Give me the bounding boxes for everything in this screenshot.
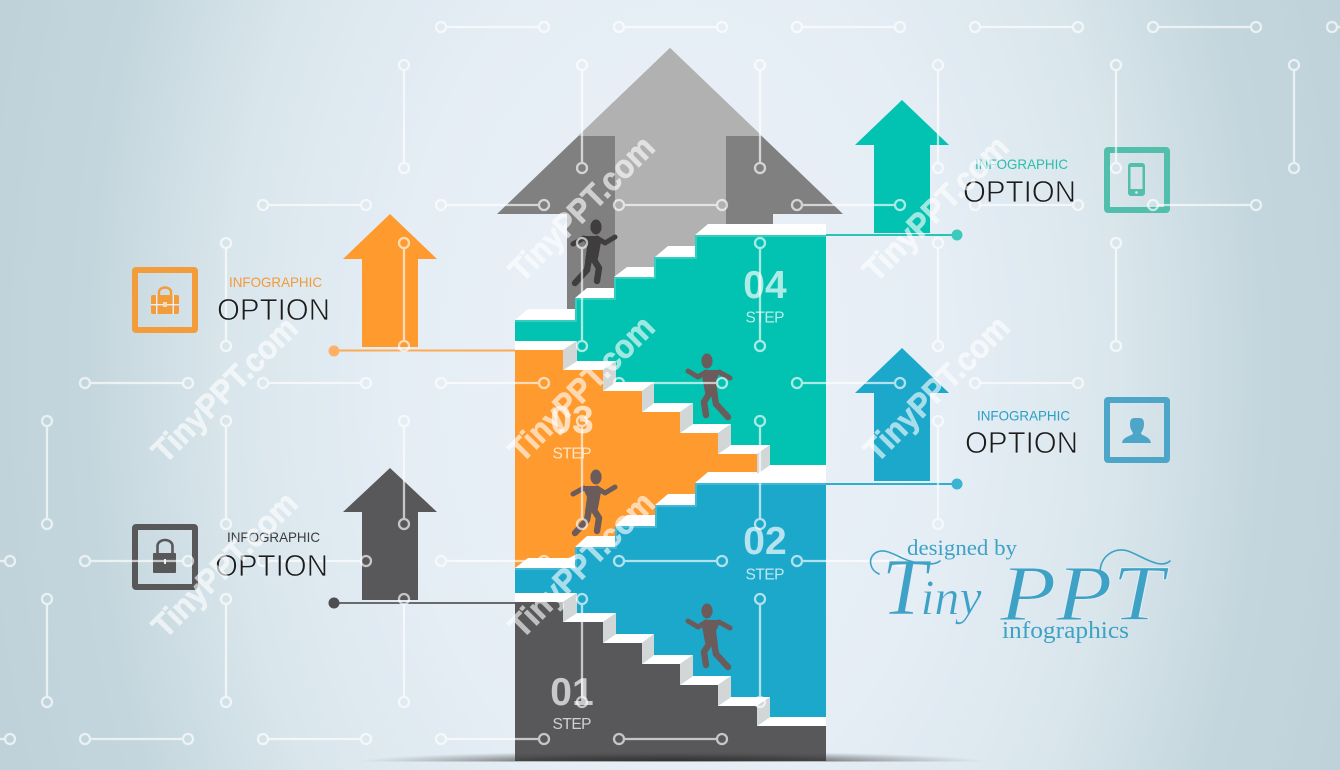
arrow: orange option	[328, 214, 515, 356]
watermarks	[144, 128, 1017, 645]
upper stair treads on blue	[515, 472, 826, 568]
step 03 label: 03	[550, 399, 594, 442]
text: blue option: INFOGRAPHIC	[977, 408, 1070, 424]
descending steps between blue and grey	[515, 593, 826, 726]
icon: briefcase in orange frame	[135, 270, 195, 330]
text: orange option: OPTION	[217, 293, 330, 327]
arrow: teal option	[826, 100, 962, 240]
watermarks: TinyPPT.com	[855, 128, 1016, 289]
ground shadow	[373, 753, 972, 762]
staircase building	[515, 224, 826, 761]
running figure on orange step	[573, 470, 615, 533]
running figure on teal step	[688, 354, 730, 417]
watermarks: TinyPPT.com	[501, 128, 662, 289]
logo: designed by TinyPPT infographics	[871, 535, 1170, 644]
watermarks: TinyPPT.com	[501, 308, 662, 469]
step 04 label: 04	[743, 264, 787, 307]
text: teal option: INFOGRAPHIC	[975, 156, 1068, 172]
step 02 label: 02	[743, 520, 787, 563]
upper stair edge highlight on blue	[515, 484, 826, 569]
descending steps between teal and orange	[515, 341, 826, 474]
step 03 label	[550, 399, 594, 462]
upper stair edge highlight on teal	[515, 236, 826, 321]
upper stair treads on teal	[515, 224, 826, 320]
tier 02 blue block	[515, 483, 826, 735]
arrow: dark grey option	[328, 468, 515, 608]
text: orange option: INFOGRAPHIC	[229, 274, 322, 290]
text: orange option	[217, 274, 330, 327]
text: teal option	[963, 156, 1076, 209]
text: grey option: OPTION	[215, 549, 328, 583]
running figure on top step	[573, 220, 615, 283]
logo: designed by TinyPPT infographics: designed by	[907, 535, 1017, 560]
step 03 label: STEP	[552, 446, 592, 462]
logo: designed by TinyPPT infographics: infographics	[1002, 618, 1129, 644]
tier 01 grey block	[515, 602, 826, 761]
running figure on blue step	[688, 604, 730, 667]
step 04 label: STEP	[746, 310, 784, 326]
icon: person in blue frame	[1107, 400, 1167, 460]
big grey arrow behind the stairs	[497, 48, 843, 320]
tier 04 teal block	[515, 235, 826, 480]
step 02 label: STEP	[746, 566, 784, 584]
arrow: blue option	[826, 348, 962, 490]
watermarks: TinyPPT.com	[856, 308, 1017, 469]
text: grey option	[215, 529, 328, 583]
step 01 label	[550, 671, 594, 733]
icon: padlock in grey frame	[135, 527, 195, 587]
watermarks: TinyPPT.com	[144, 309, 305, 470]
text: teal option: OPTION	[963, 175, 1076, 209]
text: grey option: INFOGRAPHIC	[227, 529, 320, 545]
logo: designed by TinyPPT infographics: PPT	[999, 549, 1170, 638]
step 02 label	[743, 520, 787, 584]
watermarks: TinyPPT.com	[144, 484, 305, 645]
icon: phone in teal frame	[1107, 150, 1167, 210]
step 01 label: 01	[550, 671, 594, 714]
step 01 label: STEP	[552, 716, 592, 733]
text: blue option: OPTION	[965, 426, 1078, 460]
logo: designed by TinyPPT infographics: Tiny	[882, 544, 982, 632]
tier 03 orange block	[515, 350, 757, 580]
step 04 label	[743, 264, 787, 326]
watermarks: TinyPPT.com	[501, 484, 662, 645]
text: blue option	[965, 408, 1078, 460]
